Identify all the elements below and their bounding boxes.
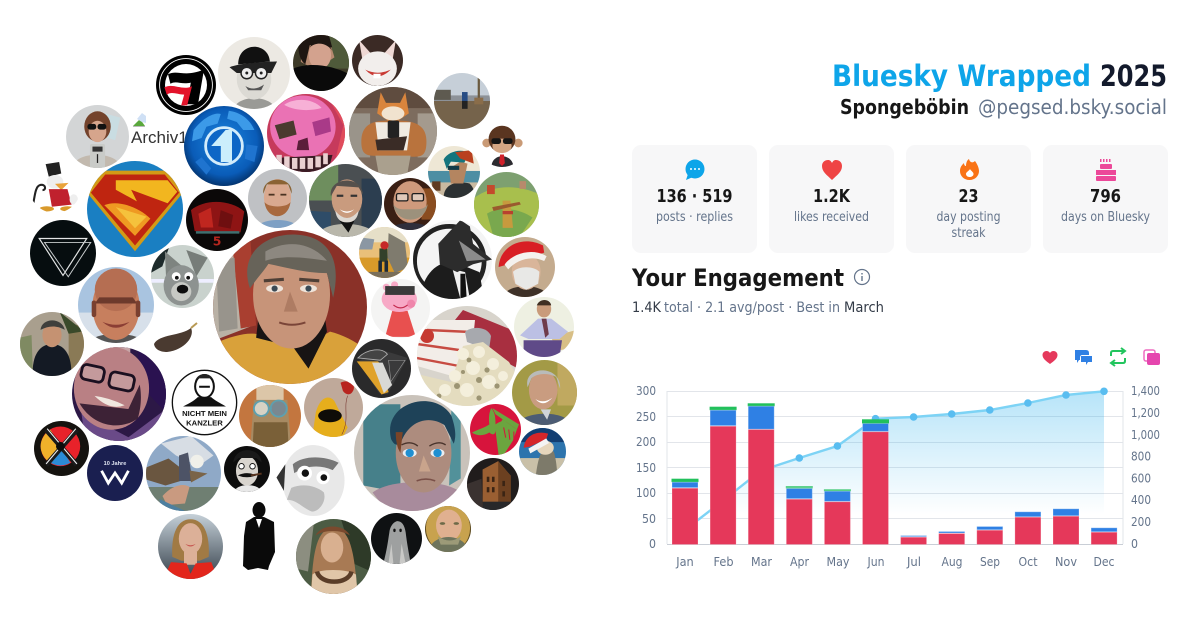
profile name and handle: Spongeböbin [840,95,969,119]
left axis labels: 200 [636,435,656,449]
card: posting streak [906,145,1031,253]
card: posting streak: 23 [958,186,978,207]
card: days on Bluesky: 796 [1090,186,1121,207]
left axis labels [636,384,656,551]
card: posts and replies: posts · replies [656,210,733,225]
card: likes received [769,145,894,253]
avatar: bearded man with glasses [384,178,436,230]
avatar: popcorn box [417,306,517,406]
month labels: Jan [675,555,694,569]
card: likes received: likes received [794,210,869,225]
left axis labels: 0 [649,537,656,551]
avatar: 10 Jahre W logo: 10 Jahre [104,461,126,467]
right axis labels: 1,000 [1131,428,1160,442]
month labels: Mar [751,555,772,569]
avatar: yellow raincoat figure with balloon [304,378,363,437]
avatar: cartoon duck with top hat [32,162,78,212]
left axis labels: 300 [636,384,656,398]
avatar: muscular shiba selfie [349,87,437,175]
avatar: brown feather [154,322,198,352]
right axis labels: 200 [1131,515,1151,529]
avatar: smiling man in grey blazer [309,164,382,237]
avatar: tuxedo silhouette [240,500,276,572]
avatar: woman in red blazer [158,514,222,578]
engagement summary text: March [844,300,884,316]
avatar: bald man outdoors [78,267,154,343]
heading: Your Engagement: Your Engagement [631,264,844,292]
card: days on Bluesky: days on Bluesky [1061,210,1150,225]
icon: heart [822,160,842,180]
month labels: Nov [1055,555,1077,569]
month labels: May [826,555,850,569]
avatar: grey-haired smiling man [512,360,577,425]
month labels: Jul [906,555,921,569]
bars: likes, replies, reposts [672,403,1117,544]
right axis labels: 1,200 [1131,406,1160,420]
avatar: green fist with leaf on red [470,404,521,455]
legend icon: replies [1075,350,1092,365]
card: posting streak: streak [952,226,986,241]
month labels: Dec [1094,555,1114,569]
card: posts and replies: 136 · 519 [656,186,732,207]
avatar: superman shield [87,161,183,257]
card: posts and replies [632,145,757,253]
legend icon: quotes [1144,350,1160,365]
title: 2025 [1100,59,1167,93]
card: days on Bluesky [1043,145,1168,253]
avatar: dark red poster [186,189,248,251]
avatar: bird on hand against sky [146,436,220,510]
avatar: pink skull painting [267,94,345,172]
avatar: groucho moustache [224,446,270,492]
profile name and handle [840,95,1167,119]
avatar: 10 Jahre W logo [87,445,143,501]
avatar: round logo with red and X [34,420,88,476]
engagement summary text: 1.4K [632,300,662,316]
right axis labels [1131,384,1160,551]
avatar: peppa pig [371,279,430,338]
bar and line chart: monthly engagement [636,384,1160,569]
avatar: white muppet with grey brow [275,445,349,519]
avatar: dark red poster: 5 [213,233,221,248]
avatar: santa hat and mask [495,237,555,297]
month labels: Oct [1018,555,1038,569]
icon: flame [960,159,979,180]
avatar: large portrait, captain in gold uniform [213,230,367,384]
avatar: old brick building [467,458,519,510]
avatar: man with red beard [248,169,307,228]
avatar: Botticelli Flora [296,518,370,594]
avatar: wolf in suit [413,220,492,299]
left axis labels: 100 [636,486,656,500]
broken image placeholder: Archiv1 [131,113,185,147]
legend icon: likes [1042,351,1058,364]
profile name and handle: @pegsed.bsky.social [978,95,1167,119]
avatar: climber illustration [359,227,410,278]
icon: cake [1096,159,1116,181]
avatar: owl with blue glasses [239,385,301,447]
left axis labels: 50 [642,512,656,526]
panel: avatar cloud [20,35,577,594]
area and line: cumulative total [685,388,1108,544]
engagement summary text: total · 2.1 avg/post · Best in [664,300,840,316]
avatar: man in bowler hat [218,37,290,109]
avatar: antifa flags [156,55,216,115]
right axis labels: 0 [1131,537,1138,551]
left axis labels: 250 [636,410,656,424]
card: likes received: 1.2K [813,186,851,207]
avatar: NICHT MEIN KANZLER badge [172,370,238,436]
avatar: man in blue shirt on sofa [514,297,574,357]
avatar: ghost under sheet [370,512,422,564]
avatar: penguin logo [352,339,411,398]
month labels: Aug [942,555,962,569]
avatar: person at lake [434,73,490,129]
avatar: smiling rabbit [352,35,403,86]
legend icon: reposts [1111,348,1125,366]
avatar: woman with blue eyes [354,395,470,511]
right axis labels: 600 [1131,472,1151,486]
left axis labels: 150 [636,461,656,475]
avatar: monkey in sunglasses [482,126,523,167]
month labels [675,555,1114,569]
avatar: smiling man, purple tones [72,347,166,441]
right axis labels: 1,400 [1131,384,1160,398]
avatar: NICHT MEIN KANZLER badge: KANZLER [186,418,223,427]
avatar: cartoon grey dog [151,245,214,308]
avatar: white triangles on black [30,220,96,286]
month labels: Feb [714,555,734,569]
avatar: woman in sunglasses [66,105,129,168]
avatar: blue-haired llama [428,146,480,198]
avatar: bird with santa hat [518,428,566,474]
avatar: dark-haired woman [293,35,349,91]
month labels: Jun [867,555,884,569]
avatar: NICHT MEIN KANZLER badge: NICHT MEIN [182,408,227,417]
right axis labels: 400 [1131,493,1151,507]
avatar: blonde woman [425,506,471,552]
title: Bluesky Wrapped [832,59,1091,93]
icon: info [854,270,870,284]
right axis labels: 800 [1131,450,1151,464]
avatar: young man in black t-shirt [20,312,84,376]
avatar: tagesschau globe [184,106,264,186]
card: posting streak: day posting [936,210,1000,225]
icon: speech bubble [686,160,704,180]
avatar: green field painting [474,172,539,237]
month labels: Apr [790,555,809,569]
month labels: Sep [980,555,1000,569]
